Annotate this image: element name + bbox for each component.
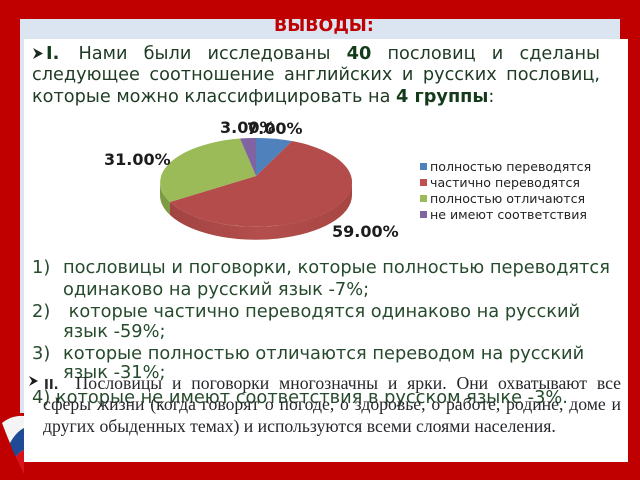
legend: [420, 159, 591, 222]
legend: частично переводятся: [430, 175, 580, 190]
icon: russian flag corner: [2, 416, 24, 473]
numbered list: одинаково на русский язык -7%;: [63, 279, 369, 300]
text block: second conclusion: других обыденных темах) и используются всеми слоями населения.: [43, 416, 556, 436]
data labels: 7.00%: [247, 119, 303, 138]
slice: полностью отличаются 31%: [160, 138, 256, 202]
data labels: 59.00%: [332, 222, 399, 241]
text block: introduction: следующее соотношение английских и русских пословиц,: [32, 65, 600, 85]
data labels: 3.00%: [220, 118, 276, 137]
title: ВЫВОДЫ:: [274, 16, 374, 36]
slice: полностью переводятся 7%: [256, 138, 292, 176]
numbered list: 1): [32, 257, 50, 278]
numbered list: 4) которые не имеют соответствия в русском языке -3%.: [32, 387, 568, 408]
text block: second conclusion: II. Пословицы и поговорки многозначны и ярки. Они охватывают все: [44, 373, 621, 393]
legend: полностью переводятся: [430, 159, 591, 174]
slice: не имеют соответствия 3%: [240, 138, 256, 176]
left blue side strip: [20, 40, 25, 413]
bullet arrow: [29, 376, 38, 386]
numbered list: язык -59%;: [63, 321, 166, 342]
numbered list: которые частично переводятся одинаково на русский: [69, 301, 580, 322]
numbered list: [32, 257, 610, 408]
text block: second conclusion: [29, 373, 621, 436]
legend: полностью отличаются: [430, 191, 585, 206]
numbered list: пословицы и поговорки, которые полностью переводятся: [63, 257, 610, 278]
top blue header band: [20, 19, 620, 40]
pie chart: [104, 118, 591, 241]
legend: не имеют соответствия: [430, 207, 587, 222]
text block: introduction: [32, 44, 600, 107]
data labels: 31.00%: [104, 150, 171, 169]
numbered list: 3): [32, 343, 50, 364]
data labels: [104, 118, 399, 241]
numbered list: которые полностью отличаются переводом на русский: [63, 343, 584, 364]
slice: частично переводятся 59%: [170, 141, 352, 227]
text block: introduction: которые можно классифицировать на 4 группы:: [32, 87, 494, 107]
numbered list: язык -31%;: [63, 362, 166, 383]
text block: introduction: I. Нами были исследованы 40 пословиц и сделаны: [46, 44, 600, 64]
numbered list: 2): [32, 301, 50, 322]
text block: second conclusion: сферы жизни (когда говорят о погоде, о здоровье, о работе, родине, доме и: [43, 394, 621, 414]
bullet arrow: [33, 48, 43, 59]
pie side faces: [160, 182, 352, 240]
